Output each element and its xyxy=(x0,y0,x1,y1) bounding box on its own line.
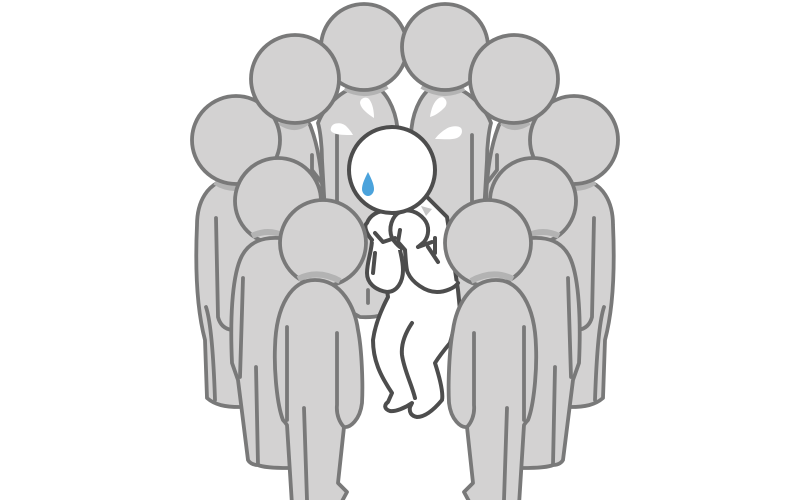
figure: third row right xyxy=(520,96,618,407)
character head xyxy=(349,127,435,213)
character body and legs xyxy=(372,195,460,417)
figure: fourth row right xyxy=(481,158,580,468)
icon: tear drop xyxy=(362,172,374,196)
highlights on the back figures xyxy=(331,97,462,139)
figure: back row right xyxy=(402,4,491,317)
figure: fourth row left xyxy=(231,158,330,468)
figure: front left xyxy=(275,200,366,500)
figure: third row left xyxy=(192,96,290,407)
character neck shadow xyxy=(421,206,432,216)
figure: back row left xyxy=(318,4,407,317)
figure: crying white character xyxy=(349,127,460,417)
character hand and arm creases xyxy=(373,230,438,273)
character left hand xyxy=(365,211,400,250)
figure: second row left body xyxy=(270,110,323,300)
figure: second row right head xyxy=(470,35,558,123)
figure: front right xyxy=(445,200,536,500)
figure: second row left head xyxy=(251,35,339,123)
character left arm xyxy=(367,240,403,292)
figure: second row right body xyxy=(486,110,539,300)
character right arm xyxy=(405,250,458,292)
character inner leg line xyxy=(402,323,415,398)
character right hand xyxy=(390,210,428,250)
